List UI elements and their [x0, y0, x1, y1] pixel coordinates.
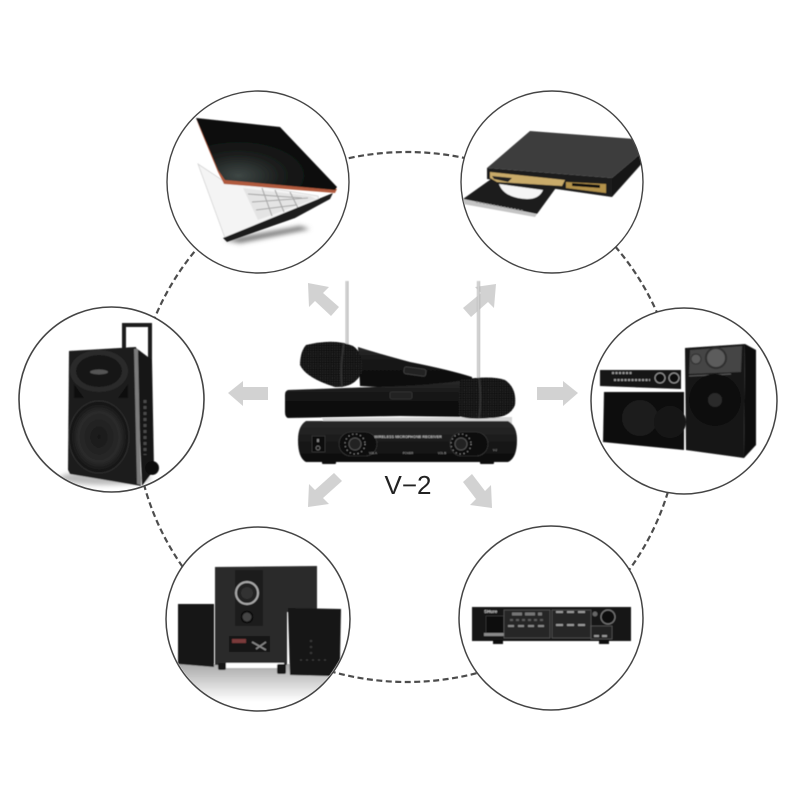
right volume panel [450, 432, 488, 456]
center product: V-2 wireless microphones [285, 281, 517, 500]
arrow: down-right [463, 474, 492, 508]
volume knob [236, 582, 258, 604]
model name: V−2 [384, 470, 432, 500]
laptop underside [223, 193, 333, 242]
back microphone [300, 342, 472, 390]
receiver feet [322, 461, 336, 464]
receiver top highlight [322, 417, 512, 425]
tray silver front [463, 199, 537, 217]
panel: DVD player [461, 91, 645, 273]
speaker chrome strip [134, 349, 141, 485]
gold tray slot [490, 172, 565, 186]
arrow: down-left [308, 473, 342, 507]
right antenna [477, 281, 480, 379]
input block 2 [552, 610, 591, 638]
laptop orange edge [196, 119, 337, 193]
horn [70, 350, 128, 392]
infographic canvas [18, 90, 778, 712]
receiver indicators: VOL A [369, 451, 377, 455]
arrow: up-left [308, 283, 339, 316]
receiver indicators: POWER [403, 451, 413, 455]
player top [487, 131, 645, 178]
output block [591, 626, 612, 639]
front microphone [285, 378, 515, 419]
subwoofer [215, 566, 317, 665]
amplifier head [600, 370, 681, 389]
receiver body [298, 421, 517, 462]
speaker side [136, 348, 154, 486]
receiver indicators [369, 448, 498, 455]
panel: 2.1 computer speakers [166, 527, 350, 714]
woofer [69, 401, 129, 473]
gold front controls [566, 182, 606, 193]
panel: laptop [167, 91, 349, 273]
large speaker front [685, 344, 745, 458]
speaker cone [689, 374, 741, 426]
left volume panel [339, 432, 377, 456]
speaker top mesh [689, 346, 742, 374]
left knob [349, 438, 361, 450]
arrow: left [228, 381, 268, 406]
vents [74, 386, 83, 398]
receiver indicators: V-2 [493, 448, 498, 452]
laptop shadow [224, 226, 310, 243]
jack [242, 612, 252, 622]
rotary dial [601, 610, 615, 624]
rack feet [493, 640, 503, 644]
laptop keyboard base [198, 164, 319, 238]
player front [487, 168, 612, 197]
display [229, 636, 270, 652]
arrow: up-right [463, 284, 496, 317]
speaker handle [124, 325, 150, 362]
arrow: right [537, 381, 578, 406]
left antenna [346, 281, 348, 345]
panel: rack mixer amplifier [459, 526, 643, 710]
input block 1 [504, 610, 550, 638]
lower speaker pair [603, 392, 684, 450]
disc tray [463, 177, 558, 214]
power switch [312, 436, 325, 452]
control panel [235, 570, 263, 626]
right satellite [288, 608, 341, 676]
reflection [179, 663, 336, 710]
disc cutout [499, 184, 543, 199]
receiver indicators: VOL B [438, 451, 446, 455]
receiver label: WIRELESS MICROPHONE RECEIVER [374, 435, 442, 439]
panel: speakers and amplifier [591, 308, 777, 494]
player side [611, 155, 641, 198]
right knob [455, 438, 467, 450]
power socket [486, 616, 504, 635]
laptop lid [196, 118, 337, 190]
speaker wheel [145, 461, 159, 475]
floor shadow [59, 471, 151, 485]
rack chassis [472, 607, 631, 641]
brand text: SHure [484, 609, 498, 614]
large speaker side [744, 344, 756, 458]
panel: trolley speaker [19, 307, 204, 492]
left satellite [178, 604, 214, 667]
speaker body [68, 347, 141, 486]
dashed connection ring [135, 152, 679, 682]
